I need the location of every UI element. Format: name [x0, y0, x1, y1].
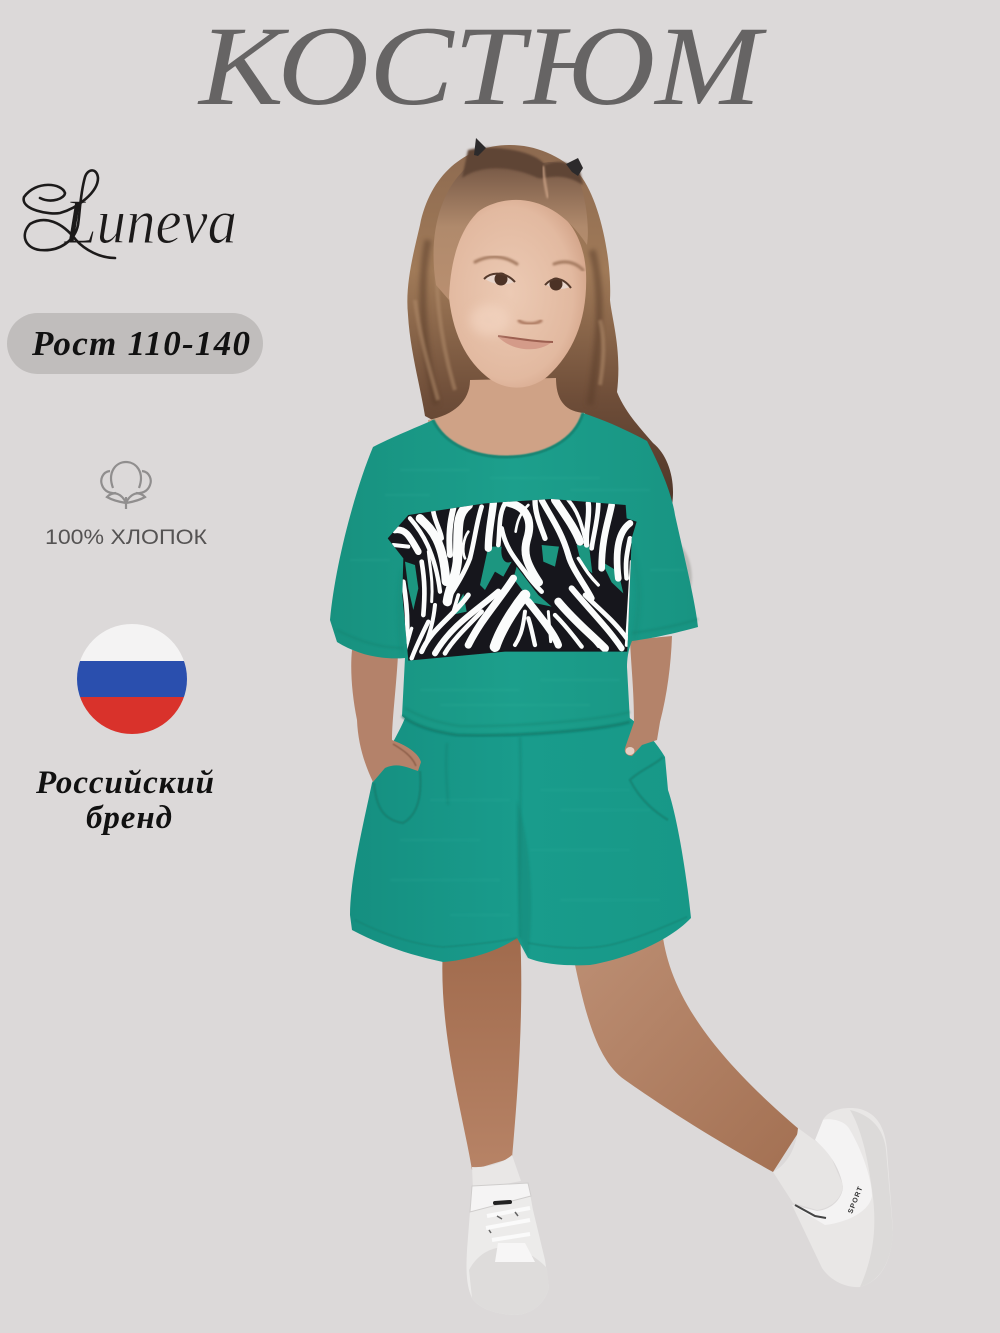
t-shirt — [330, 413, 698, 735]
fringe hair — [434, 155, 588, 300]
child photo illustration — [330, 138, 893, 1315]
icon: cotton boll — [101, 462, 151, 509]
brand origin text: бренд — [86, 800, 172, 836]
left arm and hand — [351, 650, 421, 782]
eyes — [484, 272, 571, 290]
left sneaker — [467, 1183, 549, 1315]
teal accents in print — [405, 545, 623, 615]
height badge: Рост 110-140 — [31, 324, 250, 363]
face — [448, 199, 586, 388]
right sock — [773, 1128, 843, 1210]
mouth — [498, 336, 553, 349]
hair bows — [474, 138, 583, 176]
cheek highlight — [470, 304, 510, 336]
back hair — [407, 145, 692, 590]
right arm and hand — [625, 636, 672, 756]
right leg — [572, 930, 800, 1172]
title: КОСТЮМ — [197, 4, 768, 129]
eyebrows — [475, 257, 583, 270]
right sneaker: SPORT — [847, 1185, 865, 1215]
shorts — [350, 716, 691, 965]
left leg — [442, 930, 521, 1170]
brand origin text — [35, 765, 214, 836]
icon: russian flag circle — [77, 624, 187, 734]
height badge — [7, 313, 263, 374]
neck — [428, 378, 590, 470]
material label: 100% ХЛОПОК — [45, 525, 208, 549]
head — [434, 138, 588, 388]
right sneaker — [792, 1108, 893, 1287]
zebra print panel — [385, 495, 642, 665]
brand logo: Luneva — [24, 170, 237, 258]
left sock — [472, 1155, 521, 1190]
brand origin text: Российский — [35, 765, 214, 801]
brand logo: Luneva: Luneva — [63, 186, 237, 257]
nose — [518, 320, 542, 324]
